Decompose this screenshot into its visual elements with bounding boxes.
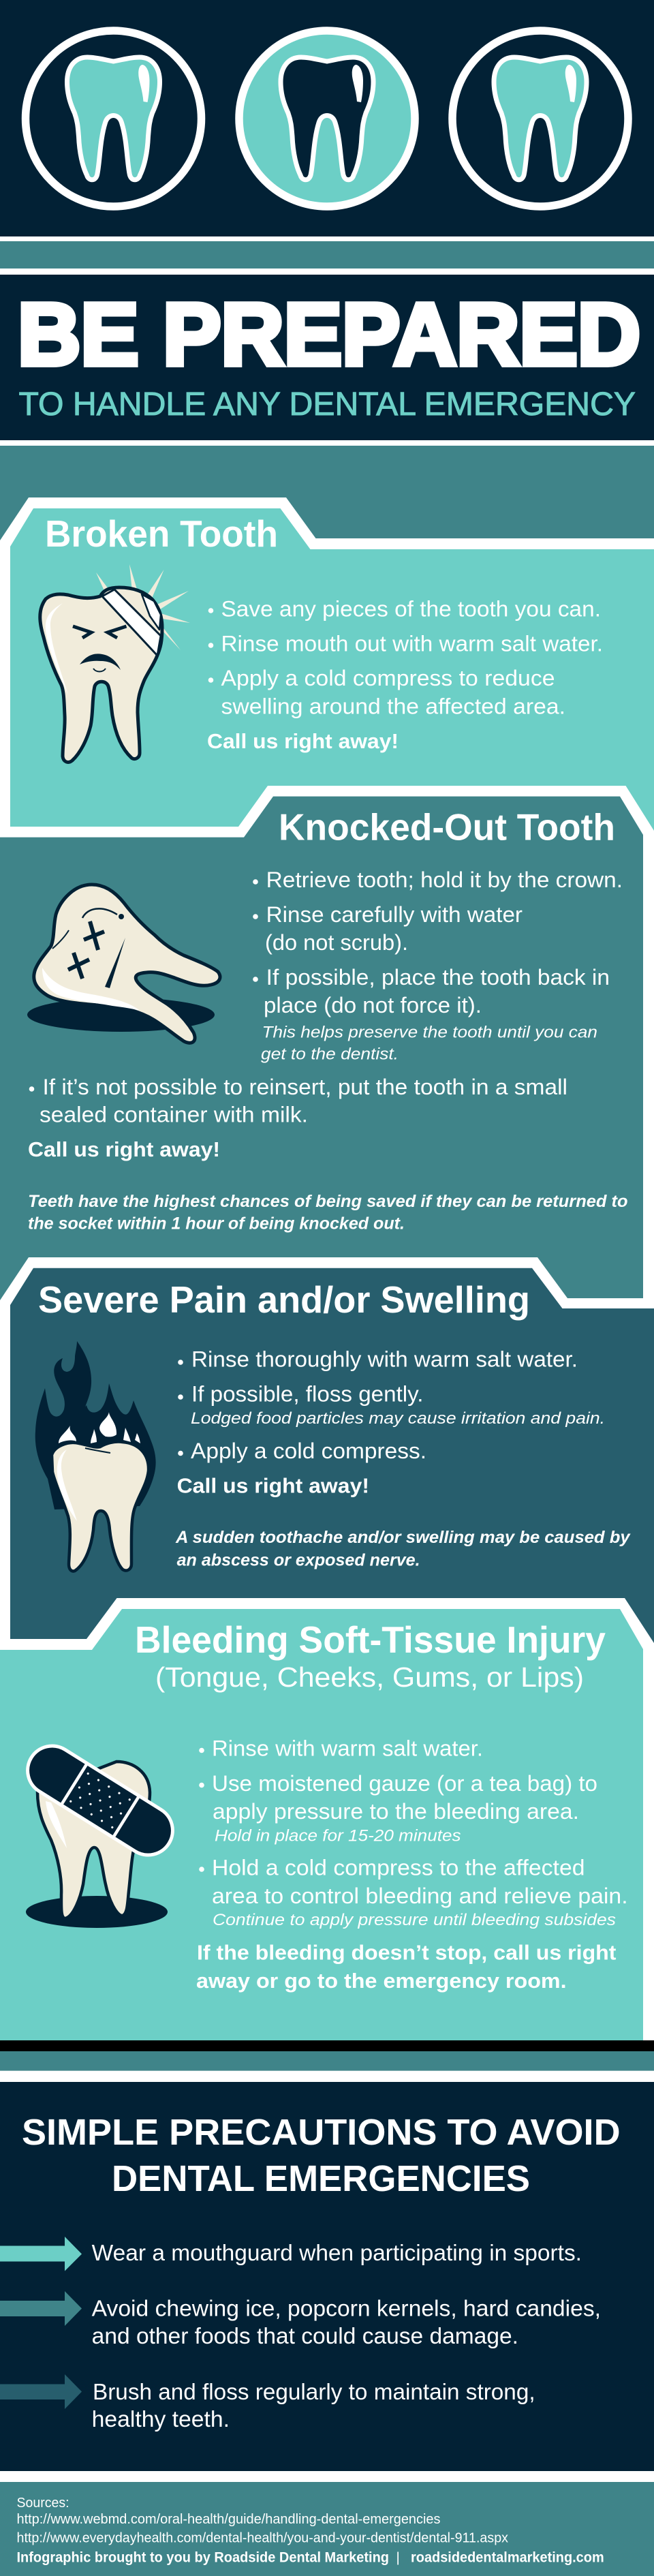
- icon: bandaged tooth: [40, 564, 190, 762]
- text: bleeding steps: Continue to apply pressure until bleeding subsides: [213, 1911, 616, 1929]
- text: bleeding steps: [196, 1736, 628, 1993]
- text: brush and floss: Brush and floss regularly to maintain strong,: [93, 2379, 535, 2404]
- text: bleeding steps: Rinse with warm salt water.: [212, 1736, 483, 1761]
- text: broken tooth steps: Apply a cold compress to reduce: [221, 666, 555, 690]
- text: bleeding steps: Hold in place for 15-20 minutes: [215, 1826, 461, 1845]
- text: severe pain steps: If possible, floss gently.: [191, 1382, 424, 1407]
- text: knocked-out tooth steps: Teeth have the highest chances of being saved if they can be returned to: [28, 1192, 628, 1211]
- text: severe pain steps: Apply a cold compress.: [191, 1439, 426, 1463]
- arrow: avoid chewing: [0, 2291, 82, 2326]
- icon: tooth in circle, left: [26, 31, 202, 206]
- title: BE PREPARED: [18, 286, 640, 384]
- text: severe pain steps: A sudden toothache and/or swelling may be caused by: [175, 1528, 631, 1547]
- text: bleeding steps: Use moistened gauze (or a tea bag) to: [212, 1771, 597, 1796]
- text: severe pain steps: Call us right away!: [177, 1473, 369, 1498]
- heading: broken tooth: Broken Tooth: [45, 512, 278, 555]
- text: severe pain steps: [175, 1347, 631, 1570]
- heading: bleeding soft-tissue injury: Bleeding Soft-Tissue Injury: [135, 1619, 606, 1661]
- text: brush and floss: healthy teeth.: [92, 2406, 230, 2432]
- heading: simple precautions: DENTAL EMERGENCIES: [112, 2158, 530, 2199]
- footer: sources and credit: |: [396, 2550, 400, 2565]
- footer: sources and credit: Sources:: [16, 2495, 69, 2511]
- footer: sources and credit: http://www.everydayhealth.com/dental-health/you-and-your-dentist/dental-911.aspx: [16, 2530, 509, 2546]
- arrow: mouthguard: [0, 2237, 82, 2271]
- subheading: affected areas: (Tongue, Cheeks, Gums, or Lips): [155, 1661, 584, 1693]
- text: bleeding steps: away or go to the emergency room.: [196, 1969, 567, 1993]
- footer: sources and credit: Infographic brought to you by Roadside Dental Marketing: [16, 2549, 389, 2565]
- text: knocked-out tooth steps: the socket within 1 hour of being knocked out.: [28, 1214, 405, 1233]
- panel: knocked-out tooth: [0, 786, 654, 1312]
- text: knocked-out tooth steps: (do not scrub).: [265, 930, 408, 955]
- icon row: three teeth in circles: [26, 31, 628, 206]
- text: severe pain steps: an abscess or exposed nerve.: [177, 1551, 420, 1570]
- text: knocked-out tooth steps: Retrieve tooth; hold it by the crown.: [266, 868, 623, 892]
- text: knocked-out tooth steps: sealed container with milk.: [40, 1103, 308, 1127]
- heading: knocked-out tooth: Knocked-Out Tooth: [279, 806, 615, 848]
- text: knocked-out tooth steps: Rinse carefully with water: [266, 902, 523, 927]
- text: knocked-out tooth steps: place (do not force it).: [264, 993, 482, 1017]
- arrow: brush and floss: [0, 2374, 82, 2409]
- subtitle: TO HANDLE ANY DENTAL EMERGENCY: [19, 386, 636, 423]
- icon: tooth with bandage: [18, 1736, 182, 1928]
- text: knocked-out tooth steps: If possible, place the tooth back in: [266, 965, 610, 990]
- text: broken tooth steps: [207, 597, 603, 753]
- text: severe pain steps: Rinse thoroughly with warm salt water.: [191, 1347, 578, 1371]
- panel: simple precautions: [0, 2082, 654, 2471]
- text: knocked-out tooth steps: If it’s not possible to reinsert, put the tooth in a small: [42, 1075, 567, 1099]
- text: broken tooth steps: Call us right away!: [207, 729, 399, 753]
- icon: tooth on fire: [35, 1341, 156, 1571]
- text: mouthguard: Wear a mouthguard when participating in sports.: [92, 2240, 582, 2265]
- heading: severe pain: Severe Pain and/or Swelling: [38, 1278, 530, 1321]
- text: bleeding steps: Hold a cold compress to the affected: [212, 1855, 585, 1880]
- footer: sources and credit: http://www.webmd.com/oral-health/guide/handling-dental-emergencies: [16, 2511, 440, 2527]
- icon: tooth in circle, centre: [239, 31, 415, 206]
- text: avoid chewing: and other foods that could cause damage.: [92, 2323, 518, 2348]
- footer: sources and credit: [16, 2495, 604, 2565]
- heading: simple precautions: SIMPLE PRECAUTIONS TO AVOID: [22, 2112, 621, 2153]
- text: bleeding steps: area to control bleeding and relieve pain.: [212, 1884, 628, 1908]
- text: brush and floss: [92, 2379, 535, 2432]
- icon: tooth in circle, right: [452, 31, 628, 206]
- panel: severe pain and swelling: [0, 1257, 654, 1656]
- panel: broken tooth: [0, 497, 654, 842]
- panel: bleeding soft-tissue injury: [0, 1598, 654, 2040]
- text: bleeding steps: apply pressure to the bleeding area.: [213, 1799, 579, 1824]
- text: knocked-out tooth steps: Call us right away!: [28, 1137, 220, 1161]
- footer: sources and credit: roadsidedentalmarketing.com: [411, 2549, 604, 2565]
- icon: knocked-out tooth: [27, 885, 220, 1043]
- text: avoid chewing: Avoid chewing ice, popcorn kernels, hard candies,: [92, 2295, 601, 2321]
- text: knocked-out tooth steps: This helps preserve the tooth until you can: [262, 1024, 597, 1041]
- heading: simple precautions: [22, 2112, 621, 2199]
- text: broken tooth steps: Rinse mouth out with warm salt water.: [221, 631, 603, 656]
- text: knocked-out tooth steps: [28, 868, 628, 1233]
- text: knocked-out tooth steps: get to the dentist.: [261, 1045, 399, 1063]
- text: bleeding steps: If the bleeding doesn’t stop, call us right: [197, 1941, 616, 1964]
- text: severe pain steps: Lodged food particles may cause irritation and pain.: [191, 1409, 605, 1428]
- text: broken tooth steps: swelling around the affected area.: [221, 694, 565, 718]
- text: avoid chewing: [92, 2295, 601, 2348]
- text: broken tooth steps: Save any pieces of the tooth you can.: [221, 597, 601, 622]
